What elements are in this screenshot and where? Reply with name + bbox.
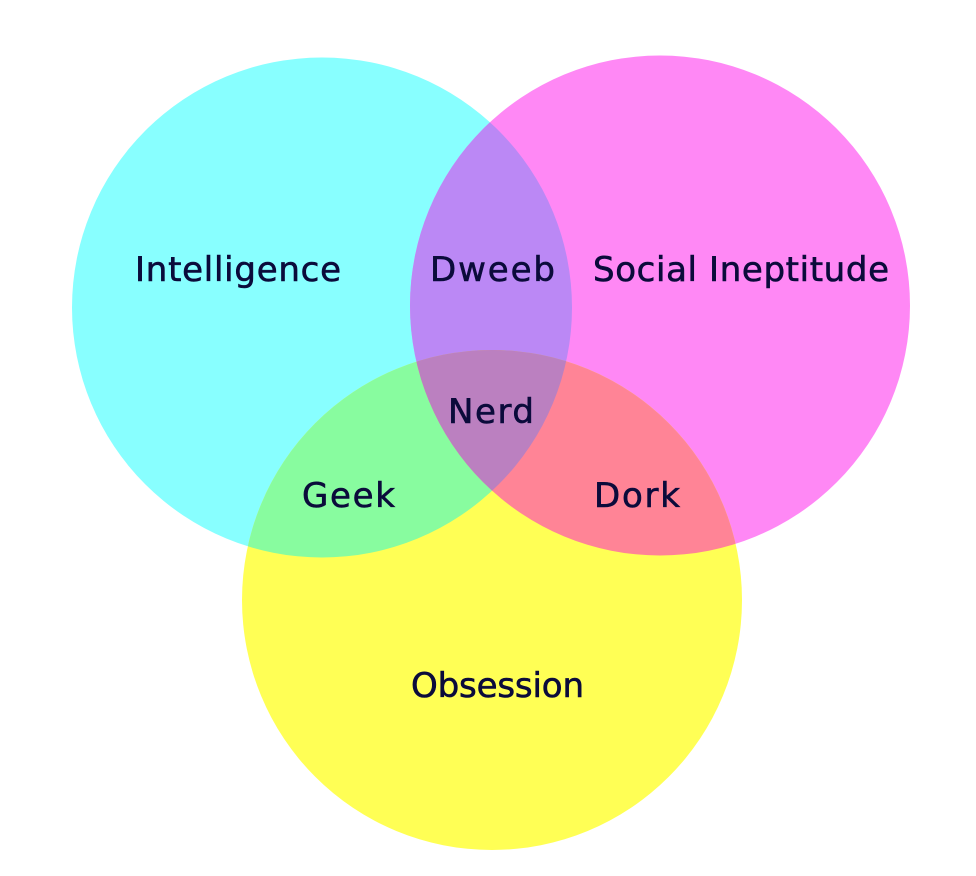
overlap: Social Ineptitude and Obsession — [416, 350, 736, 556]
label: Social Ineptitude: Social Ineptitude — [593, 250, 889, 290]
label: Dork: Dork — [594, 476, 680, 516]
circle: Obsession — [242, 350, 742, 850]
label: Nerd: Nerd — [448, 392, 534, 432]
label: Geek: Geek — [302, 476, 395, 516]
venn diagram — [72, 56, 910, 850]
overlap: all three — [416, 350, 566, 490]
label: Obsession: Obsession — [411, 666, 584, 706]
label: Dweeb: Dweeb — [430, 250, 555, 290]
overlap: Intelligence and Obsession — [248, 350, 566, 558]
circle: Social Ineptitude — [410, 56, 910, 556]
circle: Intelligence — [72, 58, 572, 558]
label: Intelligence: Intelligence — [135, 250, 341, 290]
overlap: Intelligence and Social Ineptitude — [410, 122, 572, 362]
